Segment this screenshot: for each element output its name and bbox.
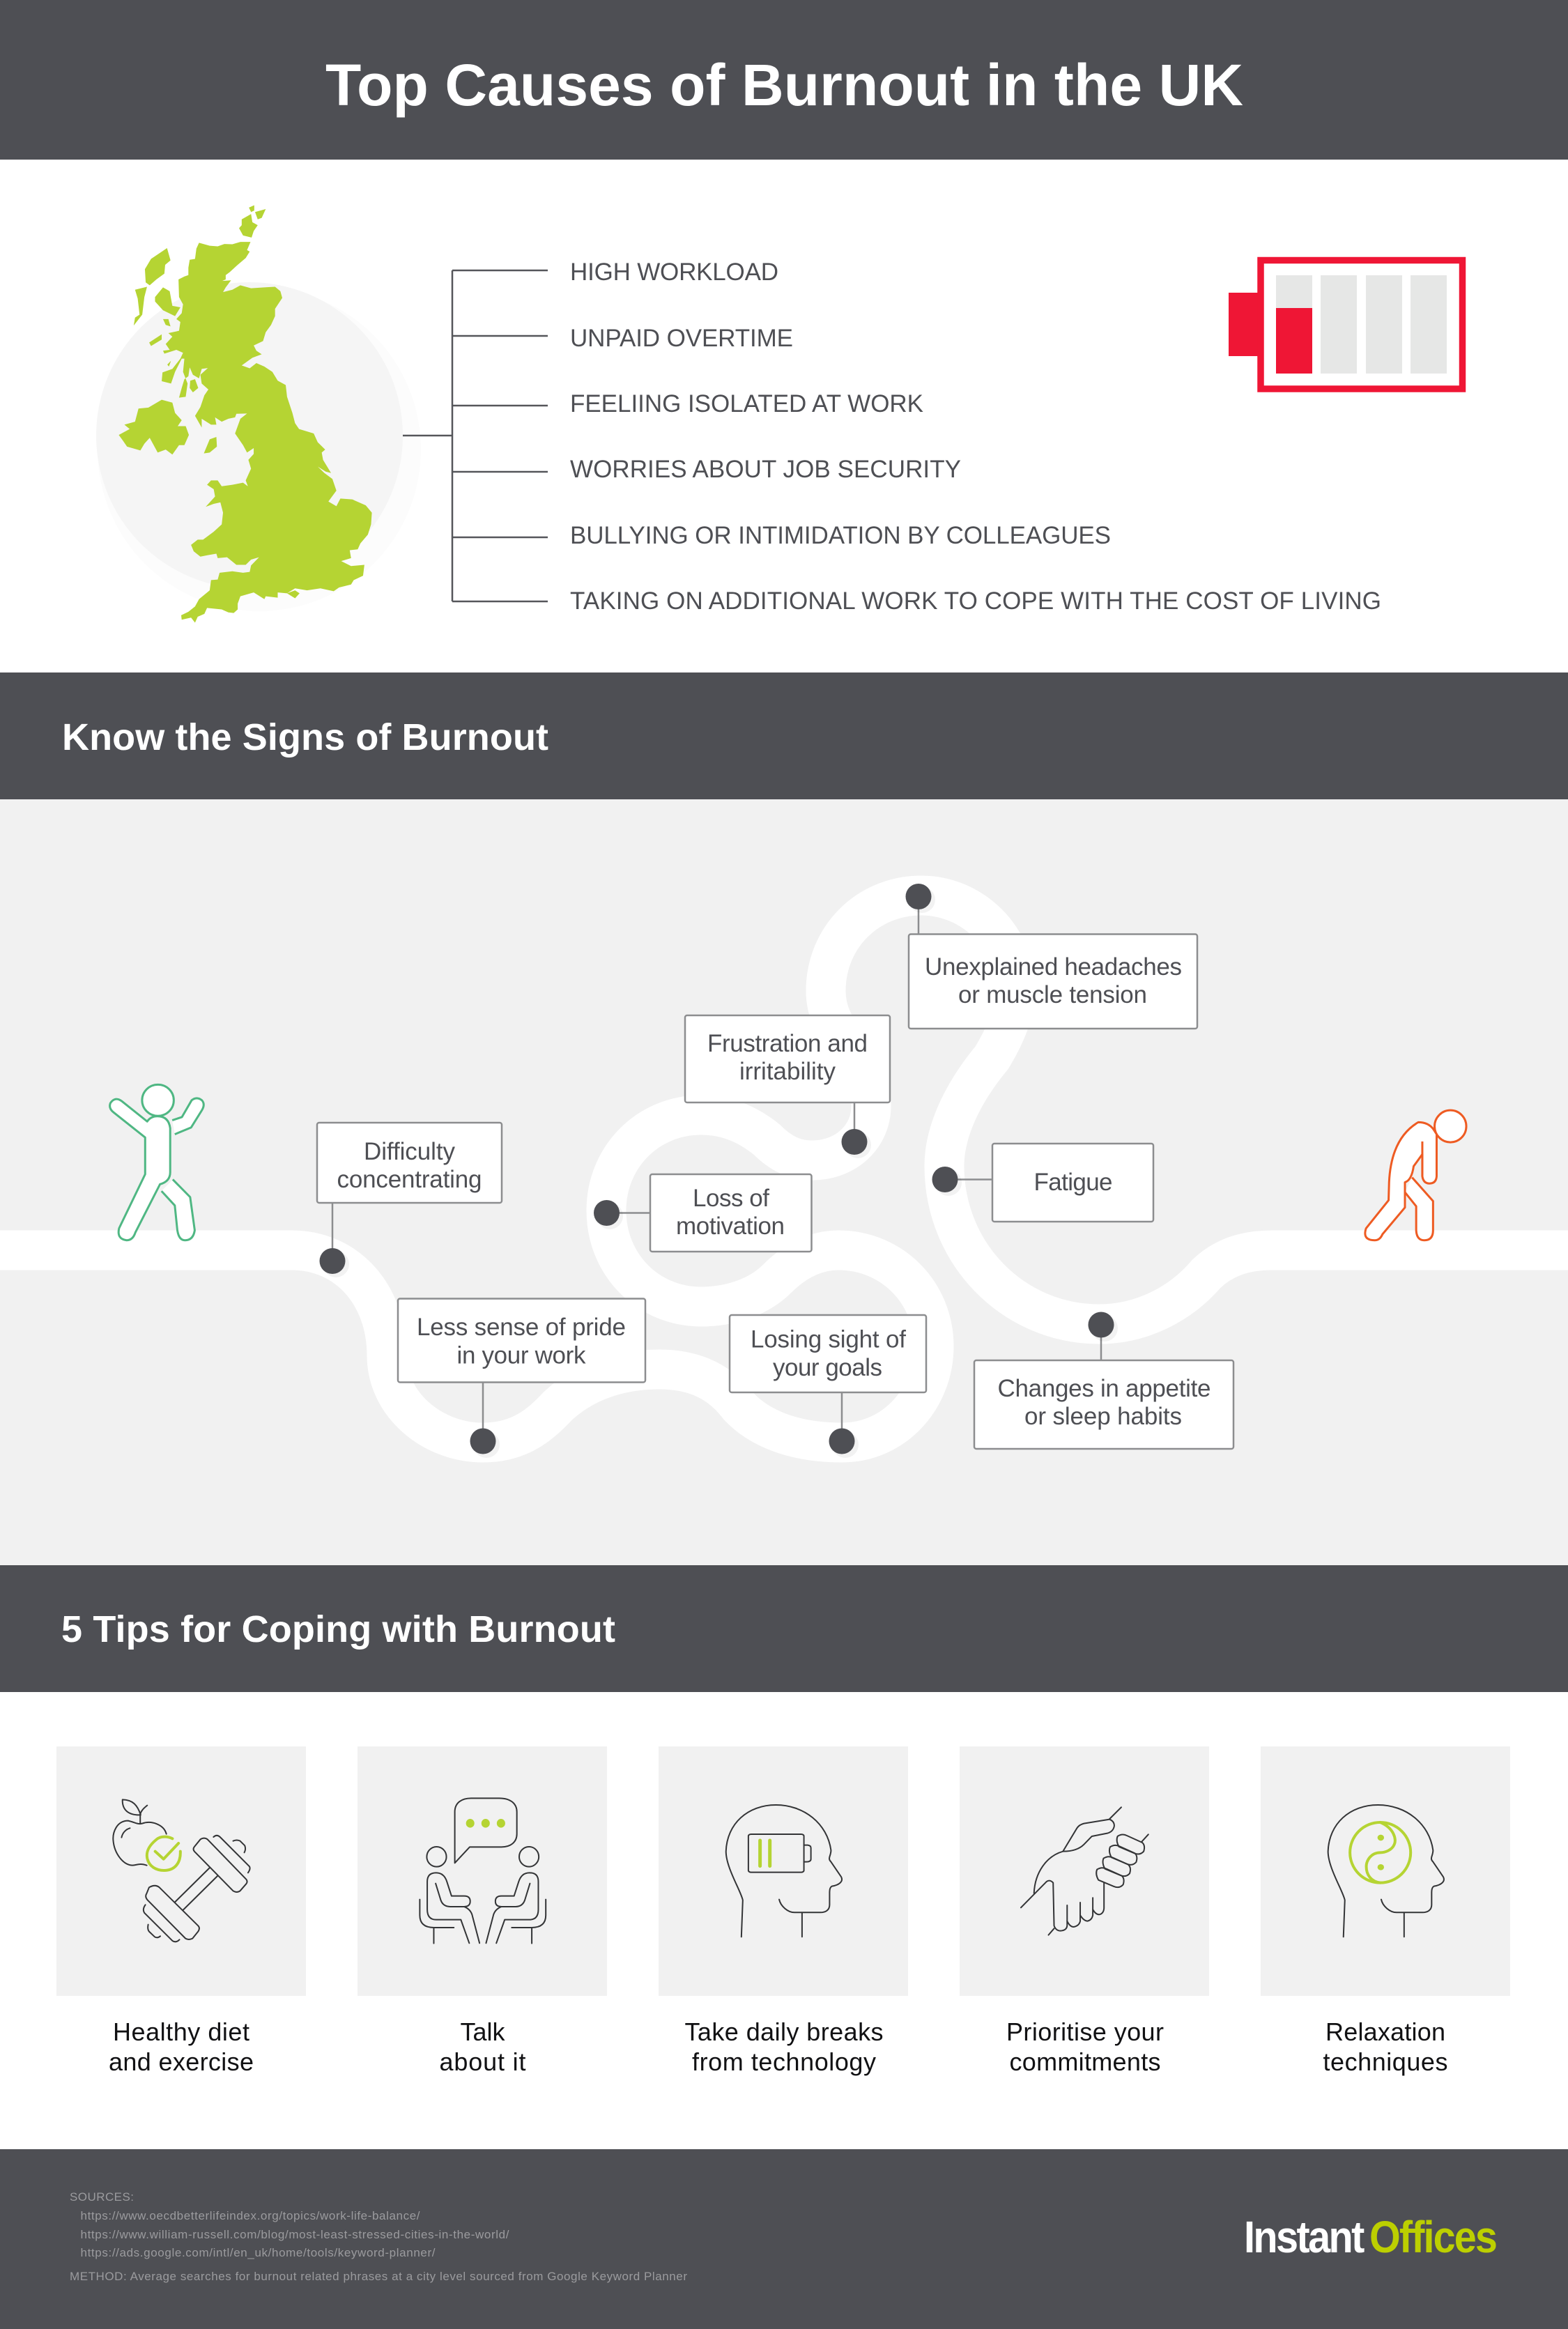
tip card: healthy diet and exercise: [56, 1746, 306, 2076]
list of causes: WORRIES ABOUT JOB SECURITY: [570, 456, 961, 483]
sources and method: https://www.william-russell.com/blog/most-least-stressed-cities-in-the-world/: [81, 2228, 509, 2241]
callout: changes in appetite: Changes in appetite: [998, 1375, 1211, 1402]
callout: loss of motivation: motivation: [676, 1213, 785, 1240]
list of causes: FEELIING ISOLATED AT WORK: [570, 390, 923, 417]
callout: fatigue: Fatigue: [1034, 1169, 1112, 1196]
sources and method: METHOD: Average searches for burnout related phrases at a city level sourced from Google Keyword Planner: [70, 2270, 687, 2283]
icon: energetic person: [110, 1084, 203, 1240]
callout: difficulty concentrating: [317, 1123, 502, 1277]
label: commitments: [1009, 2047, 1161, 2076]
callout: unexplained headaches: Unexplained headaches: [925, 953, 1182, 981]
label: Take daily breaks: [684, 2017, 884, 2046]
logo: Instant Offices: Instant: [1244, 2212, 1365, 2262]
icon: head with yin yang: [1328, 1805, 1444, 1937]
sources and method: https://ads.google.com/intl/en_uk/home/tools/keyword-planner/: [81, 2246, 436, 2259]
label: Relaxation: [1325, 2017, 1445, 2046]
callout: losing sight of goals: [730, 1315, 926, 1458]
connector tree: [403, 270, 548, 601]
icon: exhausted person: [1365, 1110, 1466, 1240]
label: [109, 2017, 254, 2076]
callout: changes in appetite: [974, 1312, 1233, 1449]
callout: changes in appetite: or sleep habits: [1024, 1403, 1182, 1430]
title banner: [0, 0, 1568, 160]
callout: unexplained headaches: or muscle tension: [958, 981, 1147, 1008]
list of causes: UNPAID OVERTIME: [570, 325, 793, 352]
label: [439, 2017, 525, 2076]
callout: losing sight of goals: your goals: [773, 1354, 882, 1381]
callout: less sense of pride: in your work: [457, 1342, 586, 1369]
sources and method: SOURCES:: [70, 2190, 134, 2204]
list of causes: TAKING ON ADDITIONAL WORK TO COPE WITH THE COST OF LIVING: [570, 587, 1381, 615]
callout: unexplained headaches: [906, 884, 1197, 1029]
icon: apple and dumbbell: [113, 1799, 250, 1942]
label: Talk: [460, 2017, 506, 2046]
callout: loss of motivation: [594, 1174, 811, 1252]
callout: frustration and irritability: Frustration and: [707, 1030, 868, 1057]
title banner: Top Causes of Burnout in the UK: [325, 52, 1243, 118]
tip card: prioritise commitments: [960, 1746, 1209, 2076]
icon: two people talking: [420, 1798, 546, 1944]
label: Healthy diet: [113, 2017, 249, 2046]
callout: less sense of pride: Less sense of pride: [417, 1314, 626, 1341]
label: [1006, 2017, 1164, 2076]
list of causes: HIGH WORKLOAD: [570, 259, 778, 286]
callout: frustration and irritability: [685, 1015, 890, 1158]
tip card: daily breaks from technology: [659, 1746, 908, 2076]
winding road: [0, 896, 1568, 1443]
label: and exercise: [109, 2047, 254, 2076]
tip card: relaxation techniques: [1261, 1746, 1510, 2076]
callout: frustration and irritability: irritability: [739, 1058, 836, 1085]
icon: handshake: [1021, 1807, 1148, 1935]
label: techniques: [1323, 2047, 1448, 2076]
logo: Instant Offices: Offices: [1369, 2212, 1496, 2262]
panel: signs of burnout road: [0, 799, 1568, 1565]
callout: losing sight of goals: Losing sight of: [751, 1325, 906, 1353]
label: from technology: [692, 2047, 876, 2076]
sources and method: https://www.oecdbetterlifeindex.org/topics/work-life-balance/: [81, 2209, 420, 2222]
callout: loss of motivation: Loss of: [693, 1185, 769, 1212]
icon: low battery: [1229, 261, 1462, 389]
footer: [0, 2149, 1568, 2329]
logo: Instant Offices: [1244, 2212, 1496, 2262]
map: UK on a pale circle: [96, 206, 421, 622]
callout: difficulty concentrating: Difficulty: [364, 1138, 456, 1165]
list of causes: [570, 259, 1381, 615]
icon: head with battery: [726, 1805, 842, 1937]
section heading: signs: [0, 672, 1568, 799]
panel: causes of burnout: [96, 206, 1462, 622]
callout: difficulty concentrating: concentrating: [337, 1166, 482, 1193]
sources and method: [70, 2190, 687, 2283]
tip card: talk about it: [358, 1746, 607, 2076]
label: about it: [439, 2047, 525, 2076]
section heading: tips: [0, 1565, 1568, 1692]
callout: fatigue: [932, 1144, 1153, 1222]
label: Prioritise your: [1006, 2017, 1164, 2046]
list of causes: BULLYING OR INTIMIDATION BY COLLEAGUES: [570, 522, 1111, 549]
callout: less sense of pride: [398, 1299, 645, 1458]
section heading: tips: 5 Tips for Coping with Burnout: [61, 1608, 615, 1650]
label: [684, 2017, 884, 2076]
section heading: signs: Know the Signs of Burnout: [62, 716, 548, 758]
label: [1323, 2017, 1448, 2076]
